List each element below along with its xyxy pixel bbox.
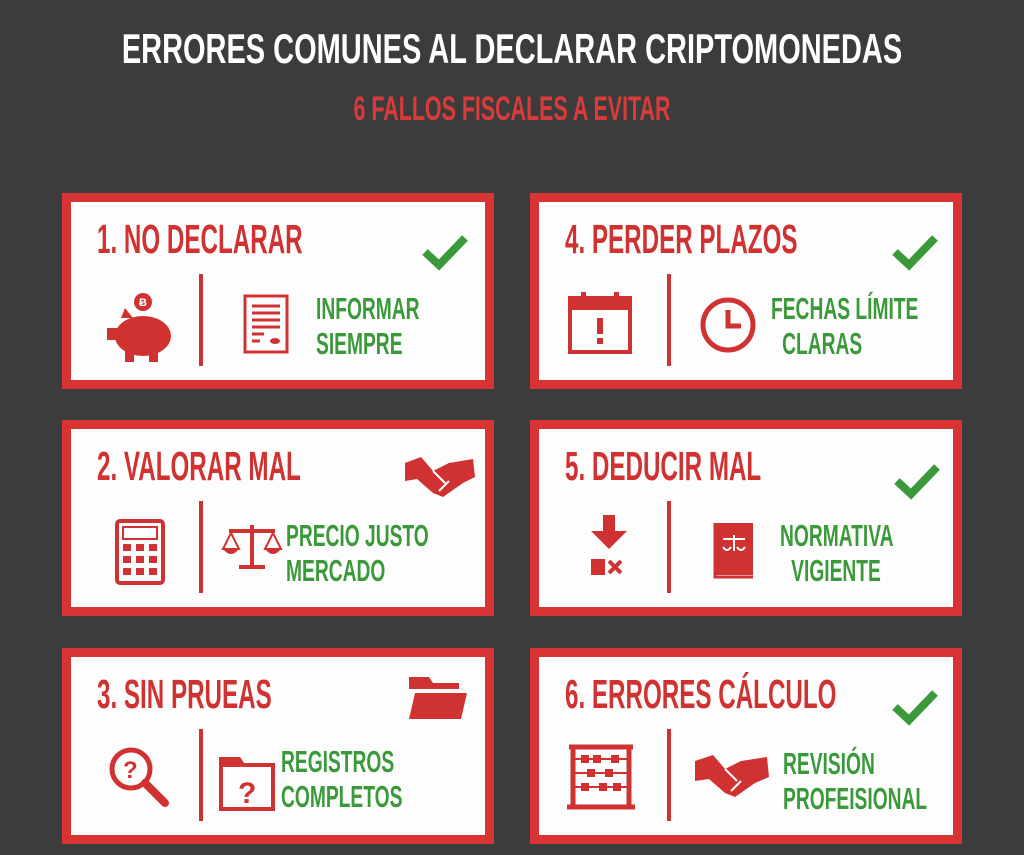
heading 6: 6. ERRORES CÁLCULO [565, 671, 836, 717]
heading 3: 3. SIN PRUEAS [97, 671, 272, 717]
text: revision profeisional [783, 746, 927, 816]
text: fechas limite claras: CLARAS [782, 326, 862, 361]
text: revision profeisional: PROFEISIONAL [783, 781, 927, 816]
icon: check [892, 690, 938, 726]
text: informar siempre: INFORMAR [316, 291, 420, 326]
icon: folder question: ? [238, 777, 256, 810]
text: normativa vigiente [780, 518, 894, 588]
text: fechas limite claras: FECHAS LÍMITE [771, 291, 918, 326]
title: ERRORES COMUNES AL DECLARAR CRIPTOMONEDAS [122, 25, 902, 72]
icon: piggy bank [107, 293, 171, 362]
icon: magnifier question: ? [123, 757, 138, 784]
text: normativa vigiente: VIGIENTE [791, 553, 881, 588]
icon: check [422, 235, 468, 271]
icon: abacus [567, 744, 635, 810]
panel: 5 deducir mal [530, 420, 962, 616]
icon: check [894, 464, 940, 500]
text: registros completos: COMPLETOS [281, 779, 402, 814]
icon: law book [714, 523, 753, 578]
text: registros completos: REGISTROS [281, 744, 394, 779]
text: fechas limite claras [771, 291, 918, 361]
icon: arrow down x [591, 515, 627, 575]
text: informar siempre: SIEMPRE [316, 326, 403, 361]
icon: scales [221, 525, 283, 569]
subtitle: 6 FALLOS FISCALES A EVITAR [354, 90, 670, 128]
text: registros completos [281, 744, 402, 814]
icon: magnifier question [110, 748, 169, 807]
icon: handshake [695, 755, 769, 797]
panel: 2 valorar mal [62, 420, 494, 616]
text: precio justo mercado: PRECIO JUSTO [286, 518, 429, 553]
heading 5: 5. DEDUCIR MAL [565, 443, 761, 489]
panel: 4 perder plazos [530, 193, 962, 389]
icon: folder question [219, 757, 275, 811]
icon: folder [409, 677, 467, 719]
icon: piggy bank: Ƀ [139, 297, 147, 309]
icon: calculator [115, 519, 165, 585]
text: normativa vigiente: NORMATIVA [780, 518, 894, 553]
text: precio justo mercado: MERCADO [286, 553, 385, 588]
icon: clock [700, 298, 756, 352]
panel: 3 sin prueas [62, 648, 494, 844]
icon: check [892, 235, 938, 271]
icon: document [244, 294, 288, 354]
text: revision profeisional: REVISIÓN [783, 746, 875, 781]
icon: handshake [405, 457, 475, 497]
panel: 1 no declarar [62, 193, 494, 389]
heading 4: 4. PERDER PLAZOS [565, 216, 798, 262]
panel: 6 errores calculo [530, 648, 962, 844]
text: precio justo mercado [286, 518, 429, 588]
text: informar siempre [316, 291, 420, 361]
heading 1: 1. NO DECLARAR [97, 216, 303, 262]
icon: calendar [568, 292, 632, 354]
heading 2: 2. VALORAR MAL [97, 443, 301, 489]
